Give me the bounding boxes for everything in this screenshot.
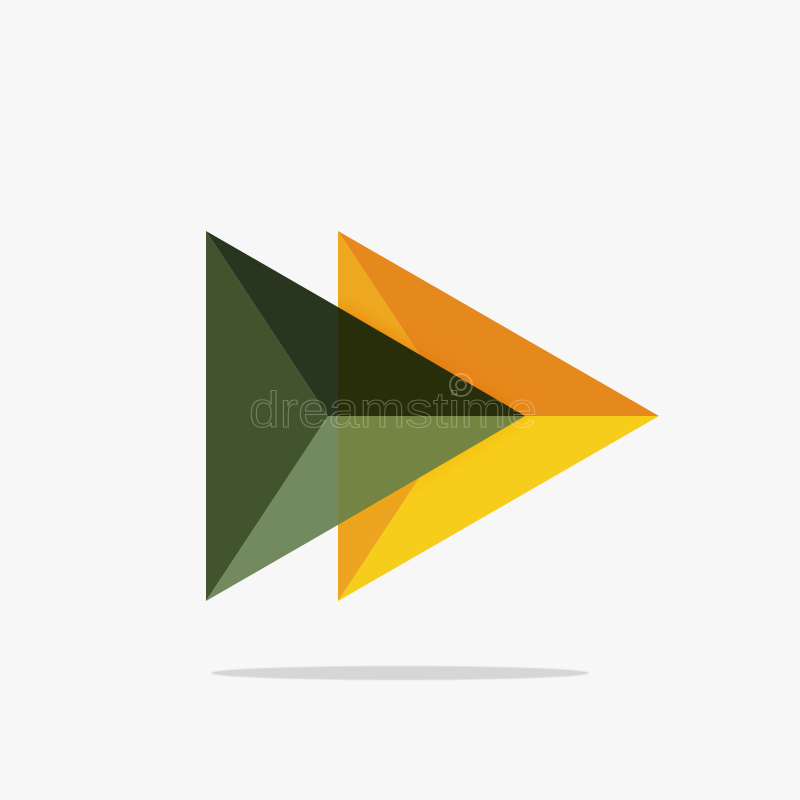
back arrow: upper left amber facet (338, 231, 460, 416)
front arrow: lower light facet (206, 416, 338, 601)
back arrow: lower yellow facet (338, 416, 659, 601)
cast shadow: lower edge (348, 428, 505, 520)
ground shadow (211, 666, 589, 680)
back arrow: orange and yellow triangle (338, 231, 659, 601)
watermark spiral logo (450, 374, 472, 396)
back arrow: upper orange facet (338, 231, 659, 416)
watermark text (249, 374, 537, 438)
front arrow: green triangle (206, 231, 525, 601)
front arrow: upper dark facet (206, 231, 338, 416)
front arrow: lower light facet over yellow (338, 416, 525, 525)
front arrow: left dark green facet (206, 231, 328, 601)
infographic: double arrow icon (206, 231, 659, 680)
back arrow: lower left amber facet (338, 416, 460, 601)
front arrow: upper dark facet over orange (338, 307, 525, 416)
cast shadow: upper edge (338, 305, 527, 416)
watermark wordmark: dreamstime (249, 382, 537, 438)
back arrow: cast shadow from front arrow (338, 305, 527, 527)
